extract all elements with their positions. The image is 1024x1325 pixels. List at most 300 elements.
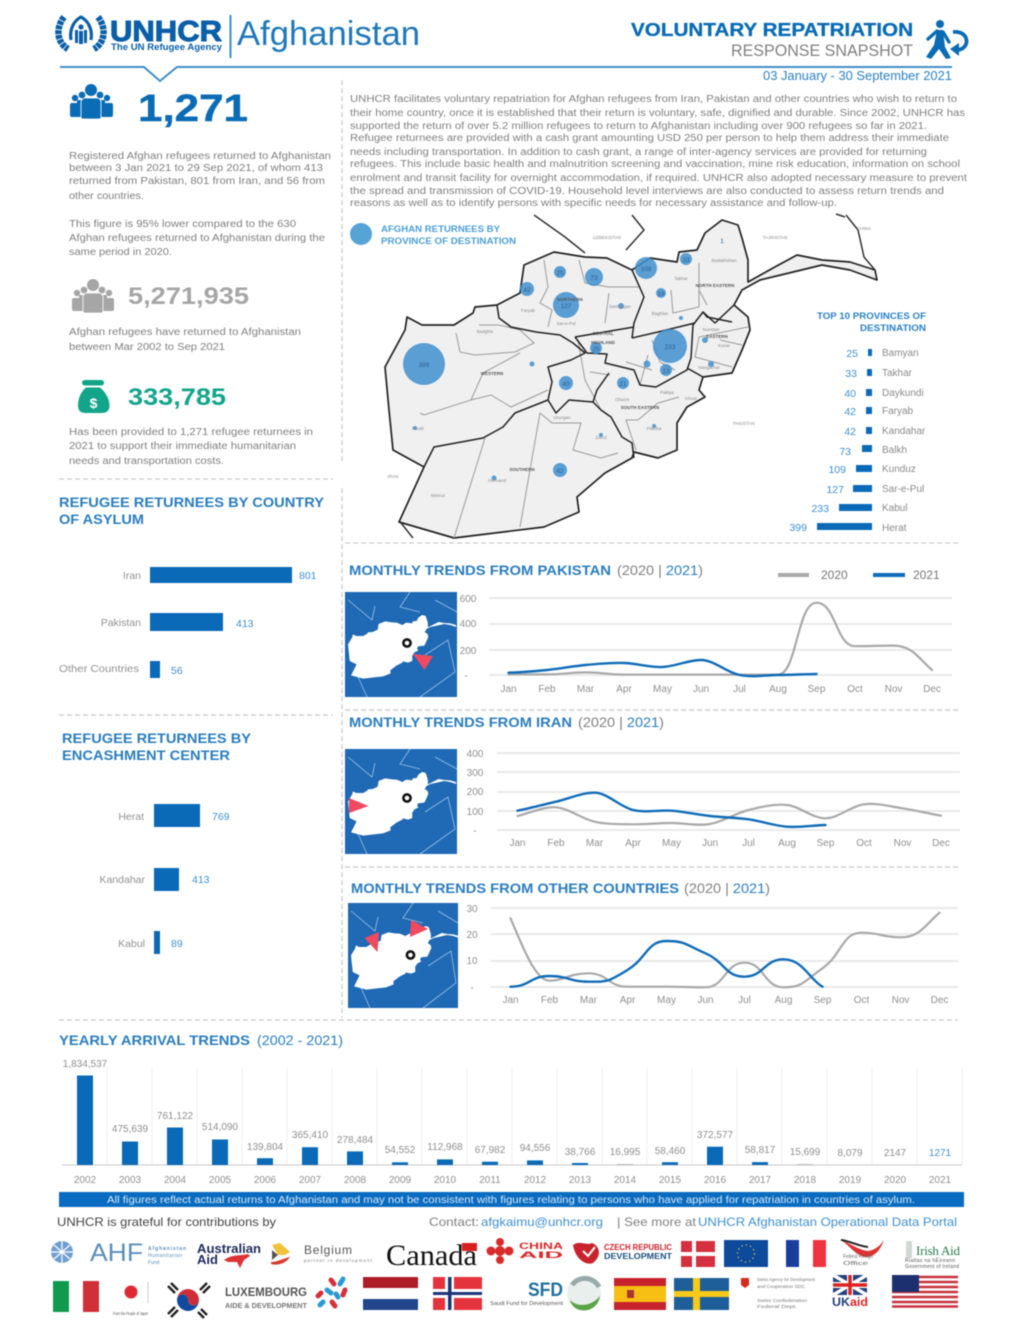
bubble values: 1: [720, 238, 724, 245]
logo: China Aid: [486, 1238, 564, 1264]
heading: REFUGEE RETURNEES BY COUNTRY: [59, 494, 325, 510]
description: This figure is 95% lower compared to the 630: [69, 219, 296, 230]
heading: MONTHLY TRENDS FROM OTHER COUNTRIES: [351, 880, 679, 896]
line chart: [467, 749, 960, 849]
contributions text: UNHCR is grateful for contributions by: [57, 1215, 276, 1229]
region and province labels: Takhar: [674, 276, 688, 281]
column chart: 2147: [884, 1148, 907, 1159]
heading: [817, 311, 927, 333]
column chart: 2003: [119, 1175, 142, 1186]
bar chart: Herat: [118, 811, 144, 823]
line chart: -: [470, 983, 474, 994]
region and province labels: EASTERN: [706, 334, 728, 339]
logo: Japan: [113, 1282, 148, 1316]
column chart: 2006: [254, 1175, 277, 1186]
column chart: 94,556: [520, 1143, 551, 1154]
line chart: Aug: [775, 995, 792, 1006]
logo: Germany: Federal Foreign: [843, 1254, 873, 1260]
bar chart: 56: [171, 665, 183, 677]
donor logos row 1: [51, 1238, 960, 1272]
logo: China Aid: AID: [519, 1250, 564, 1260]
legend: 2020: [821, 568, 848, 582]
region and province labels: NORTHERN: [557, 297, 583, 302]
description: between 3 Jan 2021 to 29 Sep 2021, of whom 413: [69, 163, 323, 174]
line chart: [460, 594, 952, 695]
logo: AHF: Humanitarian: [148, 1253, 182, 1259]
logo: Czech Republic: [573, 1243, 672, 1264]
line chart: Mar: [586, 838, 604, 849]
legend: map bubbles: AFGHAN RETURNEES BY: [381, 224, 500, 234]
description: 2021 to support their immediate humanitarian: [69, 441, 296, 452]
values: 42: [844, 426, 856, 438]
region and province labels: Farah: [412, 426, 424, 431]
logo: SFD: [490, 1276, 601, 1310]
column chart: 2010: [434, 1175, 457, 1186]
flag: Sweden: [674, 1278, 729, 1310]
description: between Mar 2002 to Sep 2021: [69, 342, 225, 353]
region and province labels: Khost: [685, 396, 697, 401]
intro text block: their home country, once it is established that their return is voluntary, safe, dignified and durable. Since 2002, UNHCR has: [350, 108, 965, 119]
line chart: Jul: [733, 684, 746, 695]
panel: monthly trends from other countries: [348, 880, 958, 1008]
bubble values: 73: [590, 275, 598, 282]
country fill and outline: [385, 220, 877, 538]
bar chart: 89: [171, 938, 183, 950]
bar chart: Pakistan: [101, 617, 141, 629]
heading: country: Afghanistan: [237, 15, 420, 53]
bar chart: Kandahar: [99, 874, 145, 886]
line chart: Oct: [854, 995, 869, 1006]
column chart: 475,639: [112, 1124, 149, 1135]
bubble values: 40: [562, 381, 570, 388]
heading: (2002 - 2021): [257, 1032, 343, 1048]
column chart: 2012: [524, 1175, 547, 1186]
line chart: Jan: [509, 838, 526, 849]
neighbouring borders: [401, 214, 875, 538]
heading: report subtitle: RESPONSE SNAPSHOT: [731, 41, 913, 60]
description: Afghan refugees have returned to Afghanistan: [69, 327, 301, 338]
line chart: Sep: [817, 838, 835, 849]
region and province labels: Baghlan: [652, 311, 669, 316]
line chart: 300: [467, 768, 484, 779]
column chart: 2019: [839, 1175, 862, 1186]
heading: [349, 562, 703, 578]
flag: Netherlands: [363, 1277, 418, 1310]
logo: AHF: Fund: [148, 1260, 160, 1266]
column chart: 372,577: [697, 1130, 734, 1141]
region and province labels: Faryab: [521, 308, 535, 313]
column chart: 514,090: [202, 1122, 239, 1133]
region and province labels: SOUTHERN: [509, 467, 535, 472]
logo: Luxembourg: AIDE & DEVELOPMENT: [225, 1303, 308, 1310]
bubble values: 25: [556, 270, 564, 277]
values: [789, 348, 858, 534]
heading: YEARLY ARRIVAL TRENDS: [59, 1032, 250, 1048]
column chart: 2007: [299, 1175, 322, 1186]
logo: UK aid: [832, 1275, 868, 1309]
values: 399: [789, 522, 807, 534]
logo: Irish Aid: Rialtas na hÉireann: [905, 1257, 955, 1264]
bar chart: Kabul: [118, 938, 145, 950]
map: Afghanistan returnees by province: [385, 214, 877, 538]
bubble values: 33: [682, 257, 690, 264]
flag: Spain: [614, 1278, 666, 1310]
flag: USA: [892, 1275, 958, 1307]
values: 40: [844, 388, 856, 400]
column chart: 38,766: [565, 1147, 596, 1158]
flag: EU: [724, 1240, 768, 1267]
flag: France: [786, 1240, 826, 1267]
description: [69, 151, 331, 258]
region and province labels: CHINA: [857, 226, 871, 231]
line chart: Feb: [547, 838, 565, 849]
column chart: [62, 1059, 962, 1186]
province bubbles: [403, 253, 714, 480]
region and province labels: [388, 226, 871, 498]
line chart: Jun: [697, 995, 714, 1006]
region and province labels: Helmand: [488, 478, 506, 483]
bar chart: Other Countries: [59, 663, 139, 675]
icon: money bag: [78, 380, 110, 413]
legend: 2021: [913, 568, 940, 582]
description: needs and transportation costs.: [69, 456, 224, 467]
bar chart: [59, 567, 317, 678]
region and province labels: Samangan: [609, 304, 631, 309]
description: returned from Pakistan, 801 from Iran, and 56 from: [69, 176, 325, 187]
line chart: 400: [460, 619, 477, 630]
line chart: 200: [460, 646, 477, 657]
column chart: 8,079: [837, 1148, 863, 1159]
line chart: Jan: [502, 995, 519, 1006]
line chart: Feb: [538, 684, 556, 695]
bar chart: 413: [192, 874, 210, 886]
heading: [59, 1032, 343, 1048]
panel: cumulative returnees: [69, 279, 301, 353]
column chart: 139,804: [247, 1142, 284, 1153]
legend: map bubbles: [350, 223, 516, 246]
flag: Italy: [53, 1281, 99, 1312]
column chart: 2013: [569, 1175, 592, 1186]
province names: Faryab: [882, 406, 914, 417]
line chart: 600: [460, 594, 477, 605]
logo: Switzerland: Swiss Confederation: [757, 1298, 808, 1303]
icon: money bag: $: [90, 395, 98, 411]
region and province labels: IRAN: [388, 474, 398, 479]
heading: MONTHLY TRENDS FROM IRAN: [349, 714, 572, 730]
heading: [349, 714, 664, 730]
intro text block: Refugee returnees are provided with a cash grant amounting USD 250 per person to help them address their immediate: [350, 133, 949, 144]
column chart: 2014: [614, 1175, 637, 1186]
header rule with chevron: [60, 67, 952, 81]
column chart: 1271: [929, 1148, 952, 1159]
heading: [59, 494, 325, 527]
column chart: 2002: [74, 1175, 97, 1186]
line chart: 100: [467, 807, 484, 818]
disclaimer banner: [59, 1192, 964, 1207]
region and province labels: TAJIKISTAN: [763, 235, 787, 240]
line chart: Oct: [847, 684, 863, 695]
line chart: Mar: [577, 684, 595, 695]
logo: China Aid: CHINA: [519, 1241, 564, 1251]
heading: (2020 | 2021): [617, 562, 703, 578]
line chart: Aug: [769, 684, 787, 695]
line chart: Jun: [702, 838, 718, 849]
vertical separator: [341, 80, 343, 1018]
line chart: Sep: [814, 995, 832, 1006]
region and province labels: Ghazni: [615, 397, 629, 402]
line chart: Dec: [923, 684, 941, 695]
logo: Czech Republic: CZECH REPUBLIC: [604, 1243, 672, 1252]
intro text block: [350, 94, 967, 209]
province names: Daykundi: [882, 388, 924, 399]
province boundaries: [420, 260, 748, 538]
line chart: May: [657, 995, 676, 1006]
column chart: 2018: [794, 1175, 817, 1186]
values: 109: [828, 464, 846, 476]
panel: current returnee figure: [69, 84, 331, 258]
column chart: 2015: [659, 1175, 682, 1186]
disclaimer banner: All figures reflect actual returns to Afghanistan and may not be consistent with figures relating to persons who have applied for repatriation in countries of asylum.: [107, 1195, 915, 1206]
logo: Belgium: Belgium: [304, 1243, 352, 1257]
logo: Belgium: partner in development: [304, 1258, 373, 1263]
panel: monthly trends from Pakistan: [345, 562, 952, 697]
line chart: 10: [466, 956, 478, 967]
intro text block: UNHCR facilitates voluntary repatriation for Afghan refugees from Iran, Pakistan and other countries who wish to return to: [350, 94, 957, 105]
line chart: Dec: [932, 838, 950, 849]
line chart: May: [662, 838, 681, 849]
bubble values: 21: [619, 381, 627, 388]
province names: Kandahar: [882, 426, 926, 437]
logo wordmark: UNHCR: [110, 16, 222, 48]
bubble values: 13: [662, 368, 670, 375]
heading: [62, 730, 252, 763]
logo: Czech Republic: DEVELOPMENT: [604, 1252, 672, 1261]
column chart: 1,834,537: [63, 1059, 108, 1070]
bar chart: 413: [236, 618, 254, 630]
column chart: 2021: [929, 1175, 952, 1186]
province names: Takhar: [882, 368, 913, 379]
column chart: 2008: [344, 1175, 367, 1186]
province names: [882, 348, 926, 534]
bubble values: 233: [665, 344, 676, 351]
heading: TOP 10 PROVINCES OF: [817, 311, 927, 321]
logo: SFD: Saudi Fund for Development: [490, 1301, 563, 1307]
province names: Herat: [882, 523, 907, 534]
logo: Switzerland: Federal Dept.: [757, 1304, 797, 1309]
line chart: Apr: [620, 995, 636, 1006]
region and province labels: Nimroz: [431, 493, 446, 498]
line chart: 30: [466, 904, 478, 915]
cumulative number: 5,271,935: [128, 283, 249, 310]
logo tagline: The UN Refugee Agency: [111, 42, 222, 52]
logo: SFD: SFD: [528, 1280, 563, 1301]
line chart: Nov: [892, 995, 909, 1006]
line chart: Dec: [931, 995, 948, 1006]
bar chart: [99, 804, 230, 954]
bars: [817, 349, 872, 530]
region and province labels: Badghis: [477, 329, 494, 334]
icon: UN emblem: [58, 17, 104, 49]
column chart: 2009: [389, 1175, 412, 1186]
region and province labels: SOUTH EASTERN: [621, 405, 659, 410]
column chart: 112,968: [427, 1142, 463, 1153]
values: 127: [826, 484, 844, 496]
logo: Australian Aid: Aid: [197, 1252, 218, 1267]
line chart: Jul: [738, 995, 751, 1006]
heading: REFUGEE RETURNEES BY: [62, 730, 252, 746]
description: [69, 327, 301, 353]
bar chart: Iran: [123, 570, 141, 582]
line chart: Nov: [885, 684, 902, 695]
heading: MONTHLY TRENDS FROM PAKISTAN: [349, 562, 611, 578]
heading: DESTINATION: [860, 323, 926, 333]
icon: group of people: [70, 84, 113, 119]
region and province labels: Nangarhar: [698, 365, 720, 370]
bubble values: 42: [523, 287, 531, 294]
bar chart: 801: [299, 570, 317, 582]
logo: Switzerland: [741, 1277, 816, 1309]
header: UNHCR logo: [58, 16, 222, 52]
inset map: other routes: [348, 903, 459, 1008]
intro text block: enrolment and transit facility for overnight accommodation, if required. UNHCR also adopted necessary measure to prevent: [350, 173, 967, 184]
region and province labels: Zabul: [595, 435, 607, 440]
line chart: Mar: [580, 995, 598, 1006]
logo: UN: [51, 1241, 73, 1263]
line chart: 20: [466, 930, 478, 941]
flag: South Korea: [168, 1283, 210, 1318]
bubble values: 127: [561, 303, 572, 310]
regional boundaries: [424, 270, 734, 467]
logo: Irish Aid: [905, 1241, 960, 1270]
bubble values: 19: [657, 291, 665, 298]
contact line: afgkaimu@unhcr.org: [481, 1215, 603, 1229]
flag: Norway: [433, 1277, 482, 1310]
line chart: [466, 904, 958, 1006]
bar chart: 769: [212, 811, 230, 823]
column chart: 67,982: [475, 1145, 506, 1156]
line chart: Aug: [778, 838, 796, 849]
column chart: 2020: [884, 1175, 907, 1186]
logo: Irish Aid: Government of Ireland: [905, 1264, 959, 1270]
column chart: 16,995: [610, 1147, 641, 1158]
region and province labels: Uruzgan: [553, 415, 571, 420]
region and province labels: WESTERN: [481, 371, 503, 376]
line chart: Apr: [625, 838, 641, 849]
region and province labels: Kunar: [718, 343, 731, 348]
values: 42: [844, 406, 856, 418]
region and province labels: HIGHLAND: [591, 340, 616, 345]
province names: Kabul: [882, 503, 908, 514]
bubble values: 42: [556, 468, 564, 475]
logo: Belgium: [271, 1243, 373, 1265]
panel: monthly trends from Iran: [345, 714, 960, 854]
donor logos row 2: [53, 1275, 958, 1318]
column chart: 2004: [164, 1175, 187, 1186]
intro text block: the spread and transmission of COVID-19. Household level interviews are also conducted to assess return trends and: [350, 186, 944, 197]
region and province labels: Paktya: [660, 390, 674, 395]
region and province labels: NORTH EASTERN: [696, 283, 734, 288]
logo: AHF: Afghanistan: [148, 1246, 186, 1252]
logo: Switzerland: Swiss Agency for Development: [757, 1277, 816, 1282]
description: Afghan refugees returned to Afghanistan during the: [69, 233, 325, 244]
logo: AHF: [90, 1239, 186, 1267]
logo: Luxembourg: [225, 1279, 345, 1310]
cash number: 333,785: [128, 384, 226, 411]
column chart: 2017: [749, 1175, 772, 1186]
intro text block: supported the return of over 5.2 million refugees to return to Afghanistan including over 900 refugees so far in 2021.: [350, 121, 927, 132]
bubble values: [419, 238, 724, 475]
province names: Balkh: [882, 445, 907, 456]
region and province labels: Nuristan: [703, 327, 720, 332]
bubble values: 399: [419, 362, 430, 369]
big number: 1,271: [138, 88, 248, 130]
intro text block: refugees. This include basic health and malnutrition screening and vaccination, mine risk education, information on school: [350, 159, 960, 170]
heading: (2020 | 2021): [684, 880, 770, 896]
province names: Bamyan: [882, 348, 919, 359]
panel: returnees by encashment center: [62, 730, 252, 954]
values: 73: [839, 446, 851, 458]
line chart: Jul: [742, 838, 755, 849]
panel: cash grant: [69, 380, 313, 467]
values: 33: [845, 368, 857, 380]
logo: Australian Aid: [197, 1241, 261, 1268]
region and province labels: Badakhshan: [711, 258, 737, 263]
line chart: Jun: [693, 684, 709, 695]
line chart: May: [653, 684, 672, 695]
divider: [230, 15, 232, 58]
column chart: 365,410: [292, 1130, 329, 1141]
line chart: 200: [467, 787, 484, 798]
description: Registered Afghan refugees returned to Afghanistan: [69, 151, 331, 162]
heading: report title: VOLUNTARY REPATRIATION: [631, 20, 913, 40]
logo: Luxembourg: LUXEMBOURG: [225, 1285, 307, 1299]
province names: Sar-e-Pul: [882, 484, 924, 495]
description: [69, 427, 313, 467]
icon: grey people: [72, 279, 114, 313]
values: 233: [811, 503, 829, 515]
description: same period in 2020.: [69, 247, 172, 258]
intro text block: needs including transportation. In addition to cash grant, a range of inter-agency services are provided for returning: [350, 147, 927, 158]
column chart: 54,552: [385, 1145, 416, 1156]
line chart: Apr: [616, 684, 632, 695]
intro text block: reasons as well as to identify persons with specific needs for necessary assistance and follow-up.: [350, 198, 837, 209]
values: 25: [846, 348, 858, 360]
column chart: 58,817: [745, 1145, 776, 1156]
line chart: 400: [467, 749, 484, 760]
logo: Japan: From the People of Japan: [113, 1311, 148, 1316]
region and province labels: Sar-e-Pul: [556, 321, 576, 326]
line chart: Oct: [856, 838, 872, 849]
logo: Irish Aid: Irish Aid: [916, 1243, 960, 1258]
logo: Australian Aid: Australian: [197, 1241, 261, 1256]
logo: Canada: Canadä: [386, 1239, 477, 1272]
region and province labels: UZBEKISTAN: [593, 235, 621, 240]
region and province labels: Paktika: [647, 426, 662, 431]
description: other countries.: [69, 191, 144, 202]
column chart: 2011: [479, 1175, 501, 1186]
contact line: Contact:: [429, 1215, 479, 1229]
inset map: Iran route: [345, 749, 457, 854]
region and province labels: PAKISTAN: [733, 421, 755, 426]
line chart: Nov: [894, 838, 911, 849]
heading: ENCASHMENT CENTER: [62, 747, 230, 763]
legend: [778, 568, 940, 582]
heading: (2020 | 2021): [578, 714, 664, 730]
line chart: -: [464, 671, 468, 682]
column chart: 761,122: [157, 1111, 194, 1122]
date range: 03 January - 30 September 2021: [763, 69, 952, 83]
logo: Germany: Office: [843, 1261, 868, 1267]
